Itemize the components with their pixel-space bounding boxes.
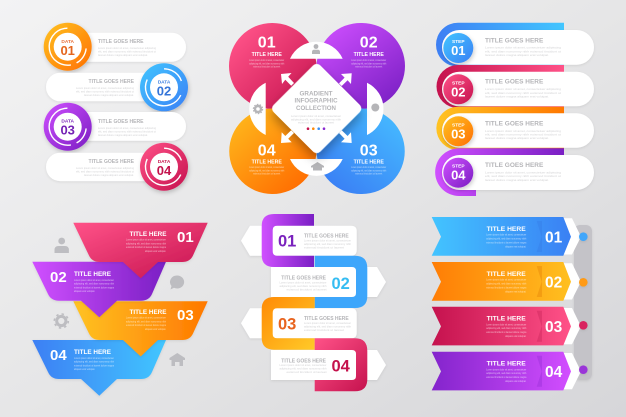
quadrant 04 orange: TITLE HERE xyxy=(252,159,282,165)
banner 01 pink: 01 xyxy=(177,229,194,246)
arrow row 03: TITLE HERE xyxy=(487,316,526,323)
banner 02 purple: 02 xyxy=(50,269,67,286)
arrow row 01: Lorem ipsum dolor sit amet, consectetuer xyxy=(486,233,526,237)
arrow row 02: adipiscing elit, sed diam nonummy nibh xyxy=(486,282,527,286)
arrow row 01: adipiscing elit, sed diam nonummy nibh xyxy=(486,236,527,240)
arrow row 02: 02 xyxy=(545,274,562,291)
arrow row 04: 04 xyxy=(545,364,563,381)
step row 02: TITLE GOES HERE xyxy=(485,79,543,86)
white lens bottom with home icon xyxy=(290,159,343,176)
snake text 04: euismod tincidunt ut laoreet xyxy=(286,370,327,374)
quadrant 03 blue xyxy=(316,108,405,194)
quadrant 04 orange xyxy=(229,108,316,194)
banner 02 purple: Lorem ipsum dolor sit amet, consectetuer xyxy=(74,278,114,282)
data row 02: laoreet dolore magna aliquam erat volutpat. xyxy=(84,93,134,97)
step row 04: laoreet dolore magna aliquam erat volutpat. xyxy=(485,178,549,182)
snake text 04 xyxy=(280,358,351,376)
center diamond: Lorem ipsum dolor sit amet, consectetuer xyxy=(291,114,341,118)
banner 01 pink: adipiscing elit, sed diam nonummy nibh xyxy=(126,241,166,245)
data row 04: DATA xyxy=(158,159,171,165)
data row 04: elit, sed diam nonummy nibh euismod tincidunt ut xyxy=(76,170,134,174)
center diamond: INFOGRAPHIC xyxy=(294,99,338,105)
data row 03: laoreet dolore magna aliquam erat volutpat. xyxy=(98,133,148,137)
quadrant 02 purple xyxy=(316,23,405,109)
snake text 02: TITLE GOES HERE xyxy=(281,276,326,282)
data row 02: DATA xyxy=(158,80,171,86)
data row 01: elit, sed diam nonummy nibh euismod tincidunt ut xyxy=(98,50,156,54)
data row 03 xyxy=(44,103,186,151)
banner 04 blue: 04 xyxy=(50,347,67,364)
snake text 02: Lorem ipsum dolor sit amet, consectetuer xyxy=(280,280,327,284)
center diamond: adipiscing elit, sed diam nonummy nibh xyxy=(291,117,341,121)
arrow row 04: adipiscing elit, sed diam nonummy nibh xyxy=(486,371,527,375)
step row 01: STEP xyxy=(452,39,465,45)
snake text 04: Lorem ipsum dolor sit amet, consectetuer xyxy=(280,363,327,367)
snake text 01: TITLE GOES HERE xyxy=(304,234,349,240)
data row 03: DATA xyxy=(61,119,75,125)
quadrant 02 purple: TITLE HERE xyxy=(354,52,384,58)
icon: person xyxy=(54,238,69,253)
quadrant 02 purple: adipiscing elit, sed diam nonummy nibh xyxy=(351,61,386,65)
step row 03: laoreet dolore magna aliquam erat volutpat. xyxy=(485,136,549,140)
snake text 01 xyxy=(278,233,351,251)
panel: funnel banners xyxy=(32,223,208,396)
data row 01: 01 xyxy=(60,43,75,58)
grey timeline bar xyxy=(574,225,592,380)
arrow row 04: Lorem ipsum dolor sit amet, consectetuer xyxy=(486,367,526,371)
center diamond: GRADIENT xyxy=(300,91,333,97)
white lens left with gear icon xyxy=(249,83,266,135)
banner 04 blue: Lorem ipsum dolor sit amet, consectetuer xyxy=(74,356,114,360)
quadrant 03 blue: euismod tincidunt ut laoreet xyxy=(355,172,382,176)
data row 03: TITLE GOES HERE xyxy=(98,119,144,125)
banner 03 orange: TITLE HERE xyxy=(130,309,166,316)
step row 01 xyxy=(436,23,594,67)
snake connector orange xyxy=(262,297,315,350)
banner 02 purple: aliquam erat volutpat. xyxy=(74,289,95,293)
arrow row 01 xyxy=(432,217,588,256)
snake text 04: TITLE GOES HERE xyxy=(281,358,326,364)
snake text 02: adipiscing elit, sed diam nonummy nibh xyxy=(280,284,327,288)
step row 04: 04 xyxy=(451,168,466,182)
snake text 03: adipiscing elit, sed diam nonummy nibh xyxy=(304,324,351,328)
quadrant 01 pink: euismod tincidunt ut laoreet xyxy=(253,65,280,69)
quadrant 03 blue: adipiscing elit, sed diam nonummy nibh xyxy=(351,168,386,172)
arrow row 03: euismod tincidunt ut laoreet dolore magna xyxy=(486,330,527,334)
banner 04 blue: aliquam erat volutpat. xyxy=(74,367,95,371)
banner 02 purple xyxy=(32,262,166,317)
step row 02 xyxy=(436,65,594,108)
white lens top with person icon xyxy=(290,42,343,59)
quadrant 03 blue: 03 xyxy=(360,142,378,159)
step row 04: TITLE GOES HERE xyxy=(485,162,543,169)
snake text 03: TITLE GOES HERE xyxy=(304,316,349,322)
snake connector pink xyxy=(315,338,367,391)
icon: chat bubble xyxy=(170,275,184,290)
arrow row 01: TITLE HERE xyxy=(487,226,526,233)
banner 03 orange: adipiscing elit, sed diam nonummy nibh xyxy=(126,319,166,323)
white card 04 xyxy=(271,350,386,380)
step row 02: Lorem ipsum dolor sit amet, consectetuer adipiscing xyxy=(485,87,561,91)
data row 01: laoreet dolore magna aliquam erat volutpat. xyxy=(98,53,148,57)
white lens right with chat icon xyxy=(367,83,383,135)
arrow top-right xyxy=(339,73,352,86)
quadrant 03 blue: Lorem ipsum dolor sit amet, consectetuer xyxy=(351,165,386,169)
quadrant 04 orange: adipiscing elit, sed diam nonummy nibh xyxy=(249,168,284,172)
step row 02: laoreet dolore magna aliquam erat volutpat. xyxy=(485,95,549,99)
step row 04: Lorem ipsum dolor sit amet, consectetuer adipiscing xyxy=(485,170,561,174)
banner 03 orange xyxy=(73,301,208,356)
step row 03: Lorem ipsum dolor sit amet, consectetuer adipiscing xyxy=(485,129,561,133)
panel: step list xyxy=(435,23,594,196)
data row 01: Lorem ipsum dolor sit amet, consectetuer adipiscing xyxy=(98,46,156,50)
step row 02: STEP xyxy=(452,80,465,86)
banner 04 blue: TITLE HERE xyxy=(74,349,111,356)
banner 01 pink: TITLE HERE xyxy=(130,231,166,238)
data row 02: Lorem ipsum dolor sit amet, consectetuer adipiscing xyxy=(76,86,134,90)
banner 04 blue: adipiscing elit, sed diam nonummy nibh xyxy=(74,360,114,364)
arrow row 04: TITLE HERE xyxy=(487,361,526,368)
quadrant 02 purple: 02 xyxy=(360,35,378,52)
quadrant 01 pink: Lorem ipsum dolor sit amet, consectetuer xyxy=(249,58,284,62)
banner 03 orange: aliquam erat volutpat. xyxy=(145,327,166,331)
arrow row 03: Lorem ipsum dolor sit amet, consectetuer xyxy=(486,322,526,326)
icon: gear xyxy=(54,314,68,328)
arrow row 01: aliquam erat volutpat. xyxy=(505,244,526,248)
step row 02: elit, sed diam nonummy nibh euismod tincidunt ut xyxy=(485,91,561,95)
arrow row 01: euismod tincidunt ut laoreet dolore magna xyxy=(486,240,527,244)
data row 03: 03 xyxy=(60,122,75,138)
data row 02 xyxy=(46,63,189,112)
data row 02: TITLE GOES HERE xyxy=(88,79,134,85)
quadrant 01 pink: 01 xyxy=(258,35,276,52)
step row 04: elit, sed diam nonummy nibh euismod tincidunt ut xyxy=(485,174,561,178)
arrow row 03 xyxy=(432,307,588,345)
white card 02 xyxy=(271,267,386,297)
quadrant 01 pink xyxy=(229,23,316,109)
quadrant 04 orange: Lorem ipsum dolor sit amet, consectetuer xyxy=(249,165,284,169)
step row 04: STEP xyxy=(452,164,465,170)
icon: home xyxy=(170,353,185,366)
arrow row 01: 01 xyxy=(545,229,563,246)
step row 03 xyxy=(436,107,594,150)
arrow row 02: TITLE HERE xyxy=(487,271,526,278)
banner 02 purple: euismod tincidunt ut laoreet dolore magna xyxy=(74,285,114,289)
arrow row 02: Lorem ipsum dolor sit amet, consectetuer xyxy=(486,278,526,282)
data row 01: DATA xyxy=(61,39,75,45)
arrow row 03: aliquam erat volutpat. xyxy=(505,334,526,338)
banner 01 pink: Lorem ipsum dolor sit amet, consectetuer xyxy=(126,238,166,242)
arrow top-left xyxy=(281,73,294,86)
data row 02: 02 xyxy=(157,84,171,98)
snake text 03: Lorem ipsum dolor sit amet, consectetuer xyxy=(304,321,351,325)
data row 02: elit, sed diam nonummy nibh euismod tincidunt ut xyxy=(76,90,134,94)
step row 01: TITLE GOES HERE xyxy=(485,37,543,44)
center diamond: COLLECTION xyxy=(296,106,336,112)
data row 04: laoreet dolore magna aliquam erat volutpat. xyxy=(84,173,134,177)
snake text 02 xyxy=(280,275,350,293)
quadrant 04 orange: 04 xyxy=(258,142,276,159)
step row 01: Lorem ipsum dolor sit amet, consectetuer adipiscing xyxy=(485,46,561,50)
quadrant 01 pink: TITLE HERE xyxy=(252,52,282,58)
banner 02 purple: TITLE HERE xyxy=(74,271,111,278)
arrow row 02 xyxy=(432,262,588,301)
step row 01: elit, sed diam nonummy nibh euismod tincidunt ut xyxy=(485,49,561,53)
step row 01: laoreet dolore magna aliquam erat volutpat. xyxy=(485,53,549,57)
panel: snake list xyxy=(241,214,386,391)
arrow row 03: 03 xyxy=(545,319,563,336)
snake text 01: Lorem ipsum dolor sit amet, consectetuer xyxy=(304,238,351,242)
banner 01 pink: euismod tincidunt ut laoreet dolore magna xyxy=(126,245,166,249)
step row 03: STEP xyxy=(452,122,465,128)
data row 04: 04 xyxy=(157,163,172,178)
banner 04 blue xyxy=(32,340,166,396)
quadrant 02 purple: Lorem ipsum dolor sit amet, consectetuer xyxy=(351,58,386,62)
arrow row 04: euismod tincidunt ut laoreet dolore magna xyxy=(486,375,527,379)
arrow bottom-right xyxy=(339,130,352,143)
panel: arrow banners timeline xyxy=(432,217,592,390)
white card 03 xyxy=(241,308,357,338)
banner 01 pink xyxy=(73,223,208,278)
step row 02: 02 xyxy=(451,84,466,100)
snake text 01: adipiscing elit, sed diam nonummy nibh xyxy=(304,242,351,246)
step row 03: 03 xyxy=(451,126,466,141)
arrow row 03: adipiscing elit, sed diam nonummy nibh xyxy=(486,326,527,330)
data row 01 xyxy=(44,23,186,71)
snake text 03 xyxy=(278,315,351,333)
snake text 02: 02 xyxy=(332,275,350,293)
arrow row 02: aliquam erat volutpat. xyxy=(505,290,526,294)
quadrant 02 purple: euismod tincidunt ut laoreet xyxy=(355,65,382,69)
panel: four circles diagram xyxy=(229,23,405,194)
quadrant 04 orange: euismod tincidunt ut laoreet xyxy=(253,172,280,176)
snake text 01: euismod tincidunt ut laoreet xyxy=(304,246,344,250)
center diamond xyxy=(270,62,363,155)
banner 03 orange: euismod tincidunt ut laoreet dolore magna xyxy=(126,323,166,327)
step row 04 xyxy=(435,148,594,196)
data row 03: elit, sed diam nonummy nibh euismod tincidunt ut xyxy=(98,130,156,134)
snake text 03: 03 xyxy=(278,315,296,333)
data row 04 xyxy=(46,142,189,191)
quadrant 01 pink: adipiscing elit, sed diam nonummy nibh xyxy=(249,61,284,65)
step row 03: elit, sed diam nonummy nibh euismod tincidunt ut xyxy=(485,132,561,136)
arrow row 04: aliquam erat volutpat. xyxy=(505,379,526,383)
white card 01 xyxy=(241,226,357,256)
banner 01 pink: aliquam erat volutpat. xyxy=(145,249,166,253)
data row 03: Lorem ipsum dolor sit amet, consectetuer adipiscing xyxy=(98,126,156,130)
banner 02 purple: adipiscing elit, sed diam nonummy nibh xyxy=(74,282,114,286)
center diamond: euismod tincidunt ut laoreet xyxy=(298,121,334,125)
banner 03 orange: Lorem ipsum dolor sit amet, consectetuer xyxy=(126,316,166,320)
snake text 02: euismod tincidunt ut laoreet xyxy=(286,288,327,292)
snake text 04: 04 xyxy=(332,358,351,376)
arrow bottom-left xyxy=(281,130,294,143)
arrow row 02: euismod tincidunt ut laoreet dolore magna xyxy=(486,286,527,290)
data row 04: TITLE GOES HERE xyxy=(88,159,134,165)
snake connector purple xyxy=(262,214,314,267)
panel: data circles list xyxy=(44,23,189,191)
quadrant 03 blue: TITLE HERE xyxy=(354,159,384,165)
banner 04 blue: euismod tincidunt ut laoreet dolore magna xyxy=(74,363,114,367)
step row 03: TITLE GOES HERE xyxy=(485,120,543,127)
data row 01: TITLE GOES HERE xyxy=(98,39,144,45)
data row 04: Lorem ipsum dolor sit amet, consectetuer adipiscing xyxy=(76,166,134,170)
snake text 03: euismod tincidunt ut laoreet xyxy=(304,328,344,332)
snake text 01: 01 xyxy=(278,233,296,251)
step row 01: 01 xyxy=(451,43,466,58)
banner 03 orange: 03 xyxy=(177,307,194,324)
arrow row 04 xyxy=(432,352,588,390)
snake connector blue xyxy=(315,256,367,308)
snake text 04: adipiscing elit, sed diam nonummy nibh xyxy=(280,366,327,370)
